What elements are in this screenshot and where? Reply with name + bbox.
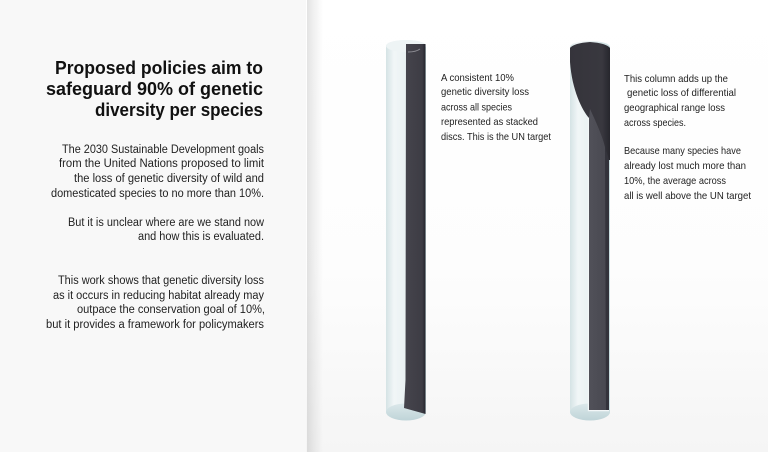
title: safeguard 90% of genetic: [46, 79, 263, 99]
callout: column 2: [624, 73, 751, 202]
text block: this work: [46, 275, 265, 331]
text block: this work: outpace the conservation goal of 10%,: [77, 304, 265, 316]
tube base: [386, 404, 426, 420]
title: [46, 58, 263, 120]
callout: column 1: discs. This is the UN target: [441, 131, 551, 143]
text block: this work: but it provides a framework for policymakers: [46, 319, 264, 331]
text block: unclear: But it is unclear where are we stand now: [68, 217, 265, 229]
callout: column 1: genetic diversity loss: [441, 86, 529, 98]
callout: column 2: geographical range loss: [624, 102, 725, 114]
column 1: uniform 10% loss: [386, 40, 426, 420]
callout: column 1: [441, 72, 551, 143]
dark right edge: [605, 147, 609, 410]
callout: column 2: across species.: [624, 117, 686, 129]
callout: column 2: genetic loss of differential: [627, 87, 736, 99]
text block: UN goals: The 2030 Sustainable Development goals: [62, 144, 264, 156]
callout: column 1: A consistent 10%: [441, 72, 514, 84]
title: diversity per species: [95, 100, 263, 120]
white edge: [588, 117, 609, 410]
panel shadow: [307, 0, 323, 452]
text block: UN goals: [51, 144, 265, 200]
text block: UN goals: domesticated species to no more than 10%.: [51, 188, 264, 200]
text block: this work: This work shows that genetic diversity loss: [58, 275, 264, 287]
callout: column 1: represented as stacked: [441, 116, 538, 128]
glass tube: [386, 40, 426, 420]
text block: UN goals: from the United Nations proposed to limit: [59, 158, 265, 170]
callout: column 2: all is well above the UN target: [624, 190, 751, 202]
dark top rim: [408, 49, 420, 52]
column 2: cumulative loss: [570, 41, 610, 420]
dark segment: [404, 44, 426, 414]
glass tube: [570, 41, 610, 420]
tube base: [570, 404, 610, 420]
callout: column 1: across all species: [441, 102, 512, 114]
background floor: [306, 0, 768, 452]
inner mid-gray slice: [589, 108, 609, 410]
tube top: [386, 40, 426, 52]
text block: UN goals: the loss of genetic diversity of wild and: [74, 173, 264, 185]
left panel: [0, 0, 306, 452]
callout: column 2: This column adds up the: [624, 73, 728, 85]
callout: column 2: Because many species have: [624, 145, 741, 157]
callout: column 2: already lost much more than: [624, 160, 746, 172]
text block: this work: as it occurs in reducing habitat already may: [53, 290, 264, 302]
title: Proposed policies aim to: [55, 58, 263, 78]
callout: column 2: 10%, the average across: [624, 175, 726, 187]
text block: unclear: [68, 217, 265, 243]
dark top mass: [570, 42, 610, 160]
text block: unclear: and how this is evaluated.: [138, 231, 264, 243]
